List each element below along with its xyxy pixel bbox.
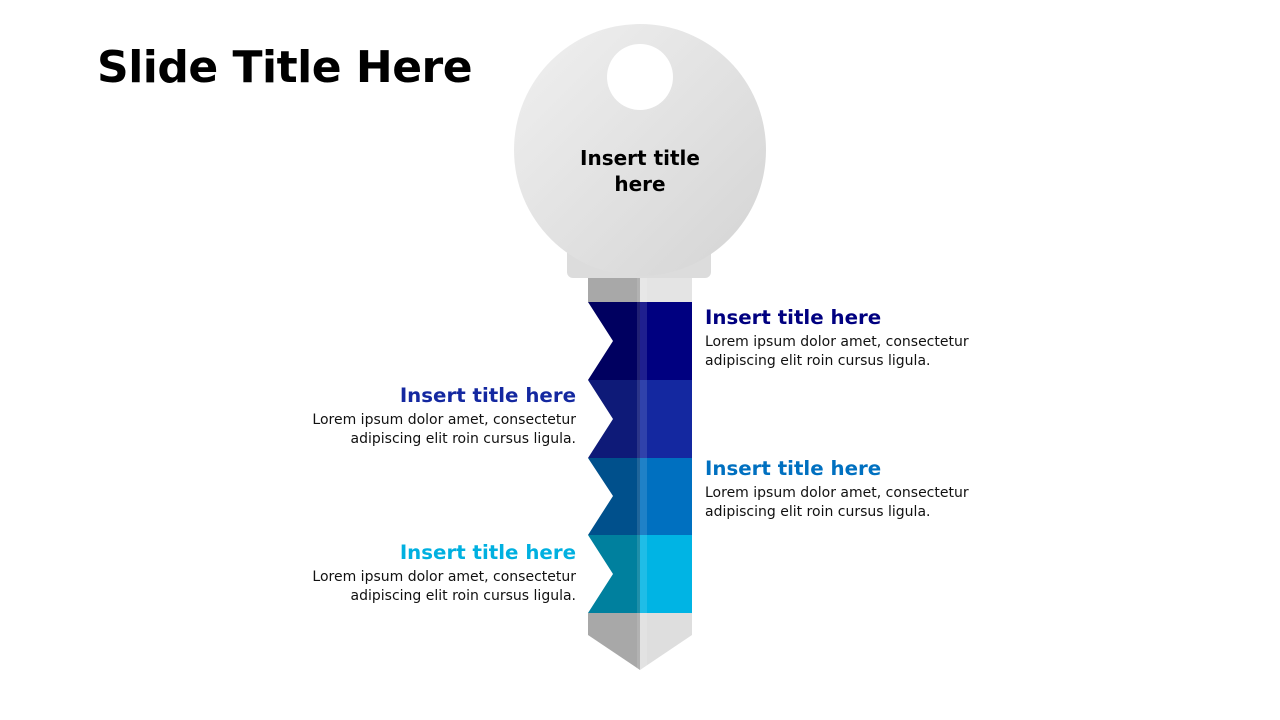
item 4 <box>312 541 576 604</box>
item 3: Insert title here <box>705 457 881 480</box>
key head <box>514 24 766 278</box>
item 2 <box>312 384 576 447</box>
item 3 <box>705 457 969 520</box>
item 2: adipiscing elit roin cursus ligula. <box>351 431 576 447</box>
item 1: adipiscing elit roin cursus ligula. <box>705 353 930 369</box>
key shaft <box>588 278 692 670</box>
item 1: Insert title here <box>705 306 881 329</box>
item 1 <box>705 306 969 369</box>
title: Slide Title Here <box>97 42 472 93</box>
key head: here <box>614 172 666 196</box>
item 4: Lorem ipsum dolor amet, consectetur <box>312 569 576 585</box>
item 4: Insert title here <box>400 541 576 564</box>
item 4: adipiscing elit roin cursus ligula. <box>351 588 576 604</box>
item 3: adipiscing elit roin cursus ligula. <box>705 504 930 520</box>
item 1: Lorem ipsum dolor amet, consectetur <box>705 334 969 350</box>
key head: Insert title <box>580 146 700 170</box>
item 2: Insert title here <box>400 384 576 407</box>
item 2: Lorem ipsum dolor amet, consectetur <box>312 412 576 428</box>
item 3: Lorem ipsum dolor amet, consectetur <box>705 485 969 501</box>
